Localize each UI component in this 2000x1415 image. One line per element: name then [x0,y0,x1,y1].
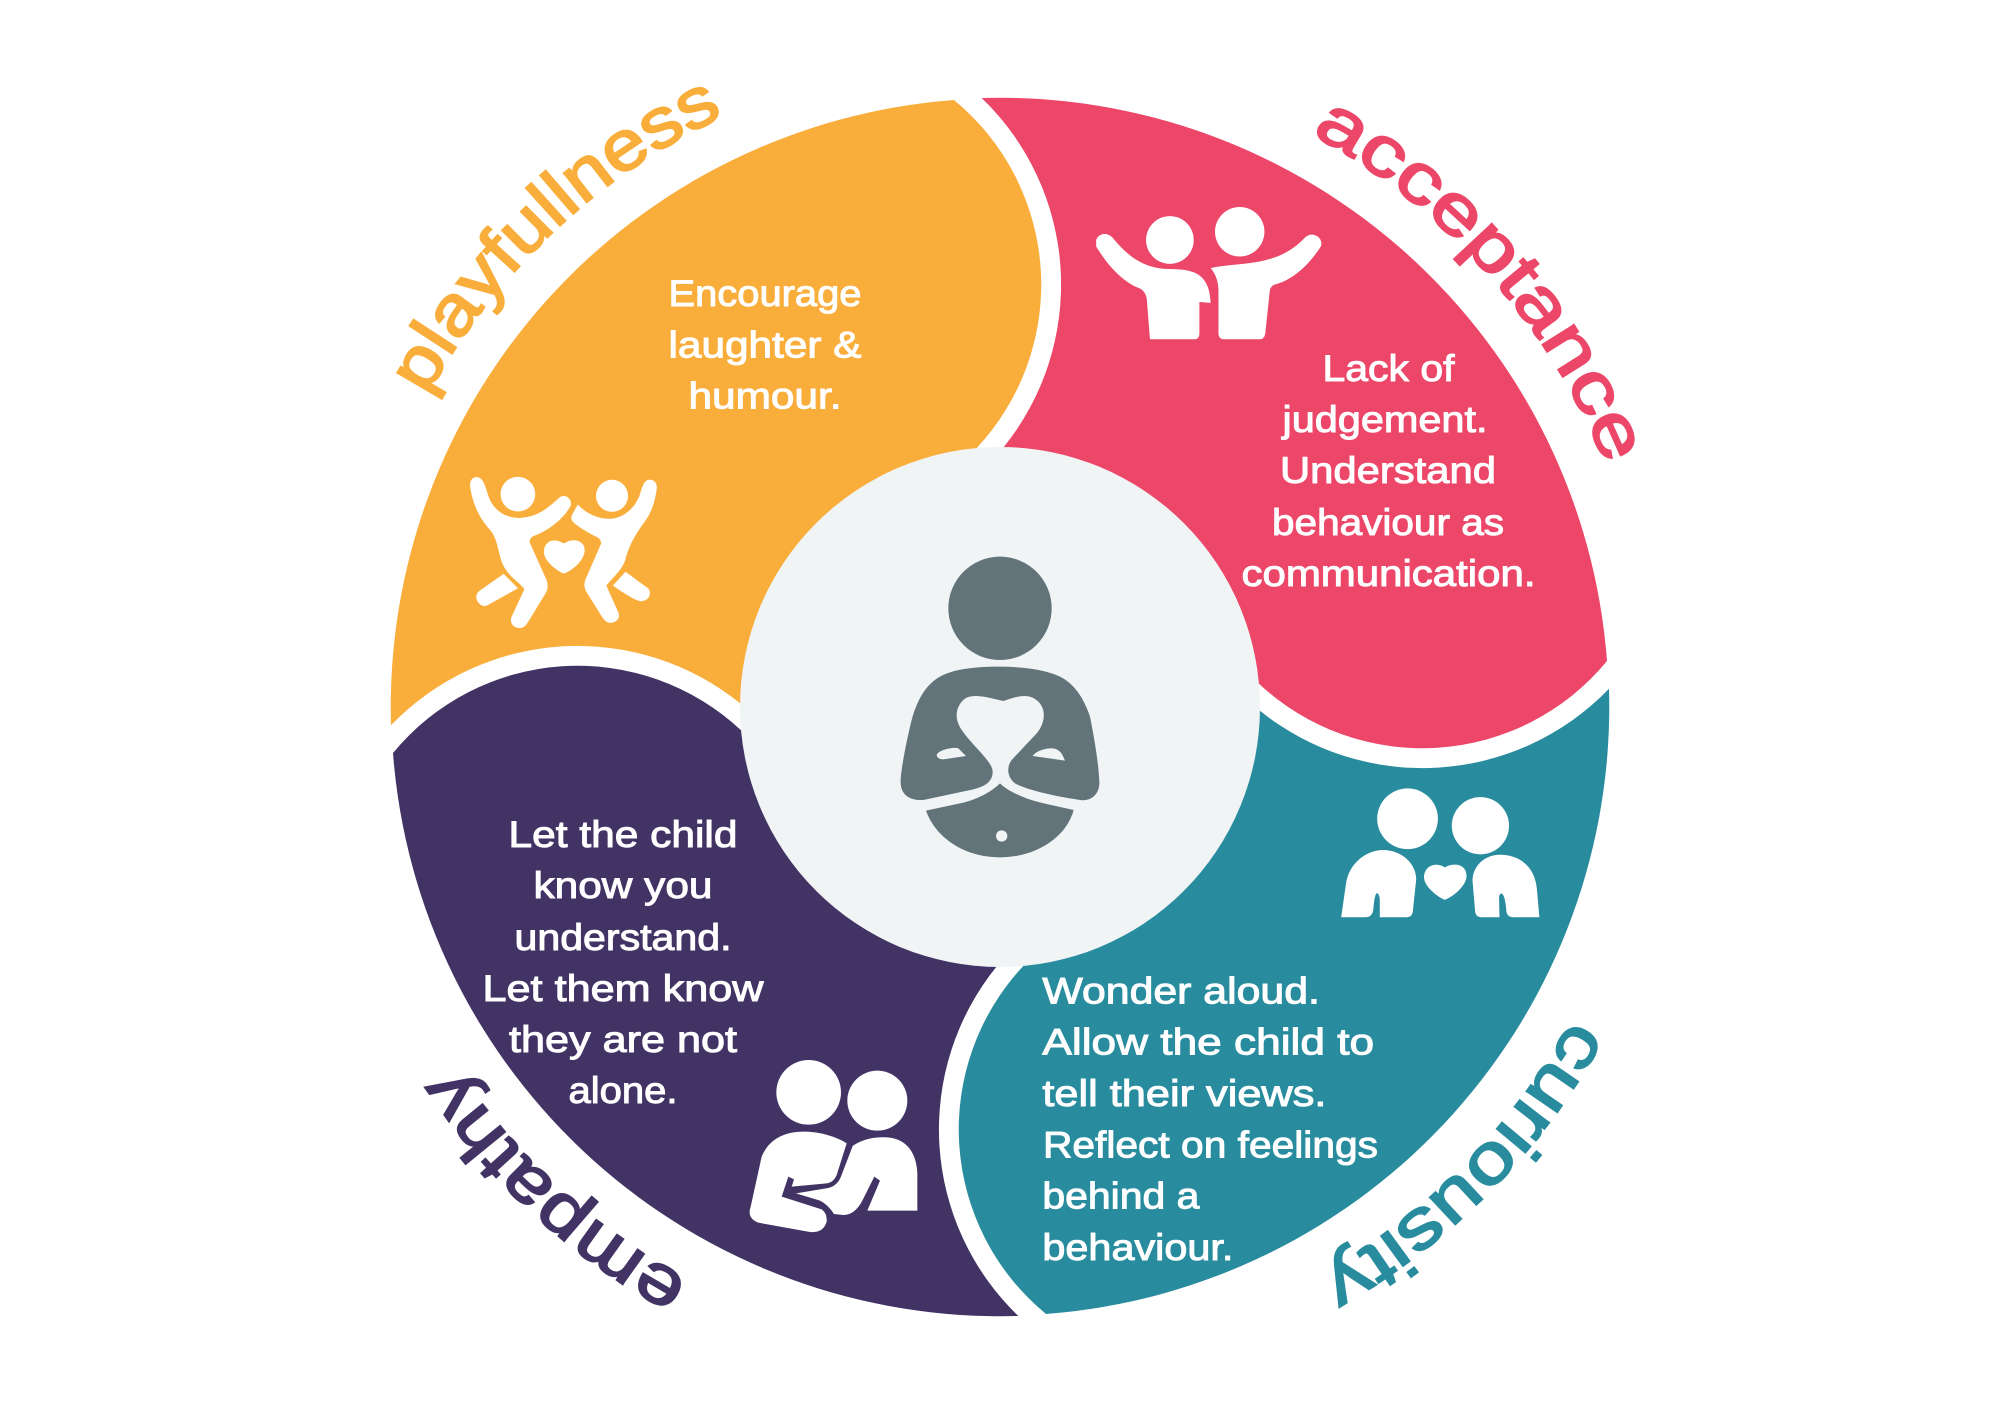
icon: central parent figure holding a heart [901,557,1099,857]
text block: acceptance description: judgement. [1281,398,1488,440]
heading: playfullness: playfullness [396,87,719,400]
text block: empathy description: Let them know [482,967,765,1009]
heading: curiousity: curiousity [1334,1027,1598,1309]
icon: two figures with heart between [1341,788,1539,917]
text block: acceptance description: communication. [1242,552,1536,594]
panel: playfulness segment [391,100,1041,725]
text block: curiosity description: tell their views. [1042,1072,1326,1114]
text block: acceptance description [1242,347,1536,594]
text block: empathy description: Let the child [508,813,738,855]
text block: playfulness description: humour. [688,375,842,417]
text block: curiosity description: behaviour. [1042,1226,1233,1268]
text block: playfulness description: laughter & [668,324,862,366]
text block: curiosity description [1042,970,1378,1268]
panel: acceptance segment [982,98,1607,748]
text block: empathy description: they are not [509,1018,738,1060]
heading: acceptance: acceptance [1316,108,1635,459]
centre circle [740,447,1260,967]
icon: two children playing with heart [470,477,657,628]
text block: acceptance description: Lack of [1322,347,1455,389]
icon: figure comforting another [750,1060,917,1232]
icon: two children with arms raised [1096,207,1321,339]
text block: empathy description: understand. [514,916,732,958]
text block: curiosity description: Allow the child to [1042,1021,1374,1063]
panel: curiosity segment [959,689,1609,1314]
text block: curiosity description: Reflect on feelings [1043,1123,1378,1165]
text block: empathy description: alone. [568,1069,678,1111]
heading: empathy: empathy [423,1078,681,1306]
text block: playfulness description [668,272,862,417]
text block: playfulness description: Encourage [668,272,862,314]
panel: empathy segment [393,666,1018,1316]
text block: curiosity description: Wonder aloud. [1042,970,1320,1012]
text block: acceptance description: Understand [1280,449,1496,491]
text block: acceptance description: behaviour as [1272,501,1504,543]
text block: empathy description: know you [534,864,712,906]
text block: empathy description [482,813,765,1111]
text block: curiosity description: behind a [1042,1175,1200,1217]
